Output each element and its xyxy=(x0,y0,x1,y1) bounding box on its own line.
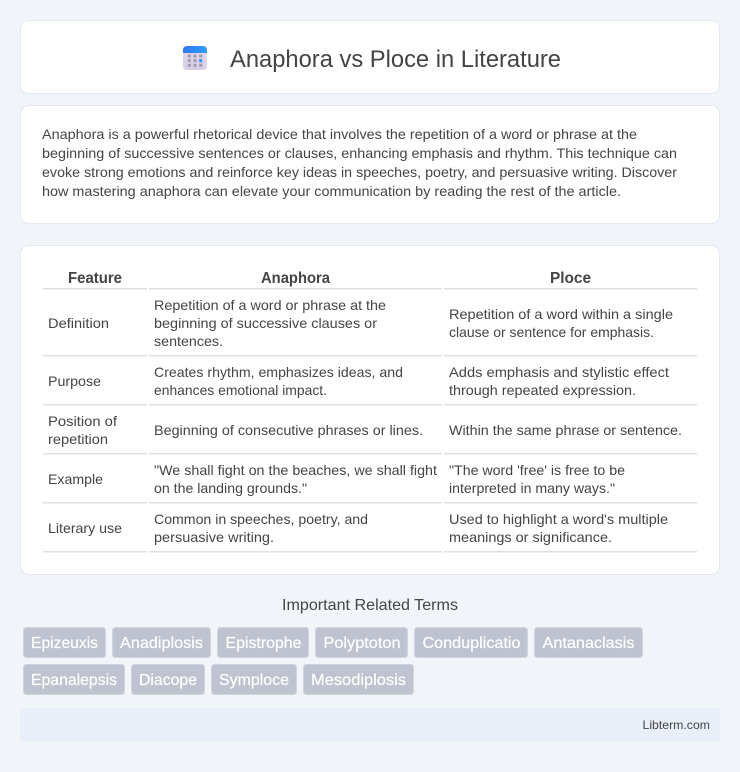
row: position of repetition: Beginning of consecutive phrases or lines. xyxy=(154,422,423,438)
row: position of repetition: Position of xyxy=(48,413,117,429)
row: literary use: Used to highlight a word's multiple xyxy=(449,511,668,527)
row: literary use: meanings or significance. xyxy=(449,529,612,545)
related term tags: Polyptoton xyxy=(324,635,400,652)
row: definition xyxy=(48,297,673,349)
intro text: Anaphora is a powerful rhetorical device that involves the repetition of a word or phrase at the xyxy=(42,126,637,142)
table header: Feature xyxy=(68,270,122,287)
row: example: interpreted in many ways." xyxy=(449,480,615,496)
row: position of repetition: Within the same phrase or sentence. xyxy=(449,422,682,438)
footer xyxy=(20,708,720,742)
row: literary use xyxy=(48,511,668,545)
row: purpose: Creates rhythm, emphasizes ideas, and xyxy=(154,364,403,380)
title: Anaphora vs Ploce in Literature xyxy=(230,46,561,73)
footer: Libterm.com xyxy=(642,718,710,732)
related term tags: Epistrophe xyxy=(226,635,302,652)
panel: title header xyxy=(20,20,720,94)
intro text xyxy=(42,126,677,199)
row: definition: beginning of successive clauses or xyxy=(154,315,377,331)
related term tags: Anadiplosis xyxy=(120,635,203,652)
row: definition: clause or sentence for emphasis. xyxy=(449,324,654,340)
row: purpose: Adds emphasis and stylistic effect xyxy=(449,364,669,380)
row: example xyxy=(48,462,625,496)
related term tags xyxy=(24,628,642,694)
related term tags: Diacope xyxy=(139,672,197,689)
table header: Anaphora xyxy=(261,270,330,287)
table header xyxy=(68,270,591,287)
row: definition: Definition xyxy=(48,315,109,331)
panel: introduction xyxy=(20,106,720,224)
related term tags: Epanalepsis xyxy=(31,672,117,689)
related term tags: Mesodiplosis xyxy=(311,672,406,689)
table header: Ploce xyxy=(550,270,591,287)
row: example: "We shall fight on the beaches, we shall fight xyxy=(154,462,437,478)
row: purpose: Purpose xyxy=(48,373,101,389)
heading: important related terms: Important Related Terms xyxy=(282,597,458,614)
related term tags: Epizeuxis xyxy=(31,635,98,652)
row: purpose: enhances emotional impact. xyxy=(154,382,327,398)
row: position of repetition xyxy=(48,413,682,447)
row: example: Example xyxy=(48,471,103,487)
row: literary use: Literary use xyxy=(48,520,122,536)
row: literary use: Common in speeches, poetry, and xyxy=(154,511,368,527)
row: definition: Repetition of a word or phrase at the xyxy=(154,297,386,313)
row: definition: sentences. xyxy=(154,333,223,349)
intro text: beginning of successive sentences or clauses, enhancing emphasis and rhythm. This technique can xyxy=(42,145,677,161)
row: example: on the landing grounds." xyxy=(154,480,307,496)
related term tags: Conduplicatio xyxy=(422,635,521,652)
related term tags: Antanaclasis xyxy=(542,635,634,652)
row: purpose xyxy=(48,364,669,398)
related term tags: Symploce xyxy=(219,672,289,689)
icon: calendar xyxy=(183,46,207,70)
row: literary use: persuasive writing. xyxy=(154,529,274,545)
intro text: evoke strong emotions and reinforce key ideas in speeches, poetry, and persuasive writing. Discover xyxy=(42,164,677,180)
row: definition: Repetition of a word within a single xyxy=(449,306,673,322)
row: position of repetition: repetition xyxy=(48,431,108,447)
panel: comparison table xyxy=(20,246,720,574)
row: purpose: through repeated expression. xyxy=(449,382,636,398)
intro text: how mastering anaphora can elevate your communication by reading the rest of the article. xyxy=(42,183,621,199)
row: example: "The word 'free' is free to be xyxy=(449,462,625,478)
